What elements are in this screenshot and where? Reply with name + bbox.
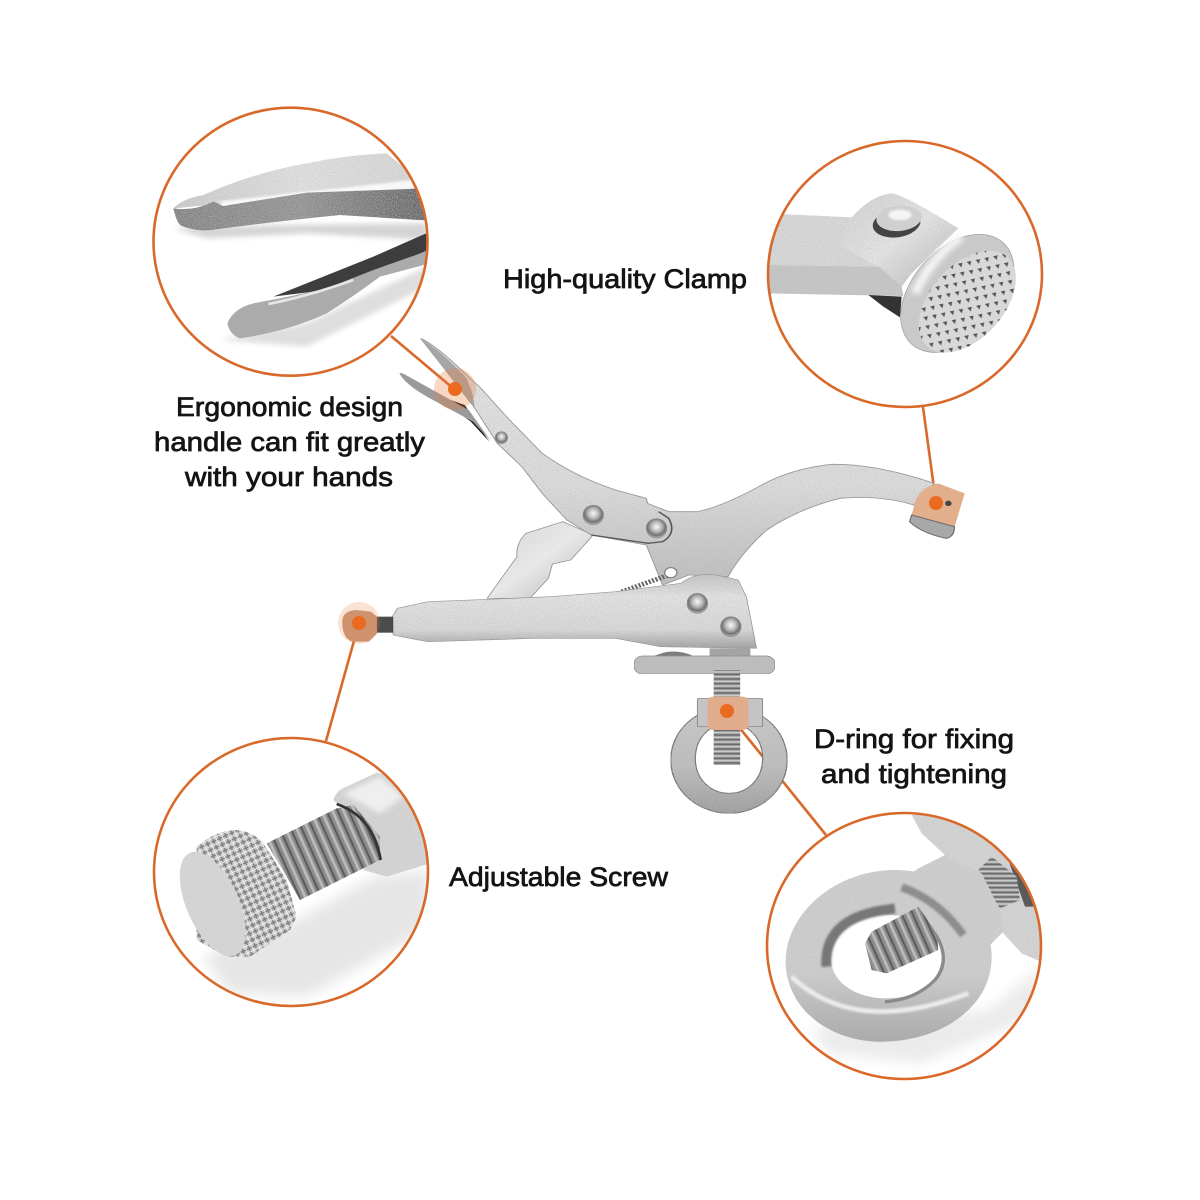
neck underside (902, 887, 963, 935)
upper jaw dark face (173, 188, 430, 230)
ring (786, 870, 992, 1042)
upper thread (977, 857, 1020, 908)
base plate (912, 813, 1048, 963)
screw head (342, 610, 377, 642)
plate dark edge (1009, 862, 1034, 907)
base plate (634, 656, 775, 674)
head cylinder (840, 193, 958, 287)
infographic (152, 106, 1044, 1080)
arm front face (765, 265, 903, 296)
spring (622, 575, 669, 592)
panel: D-ring closeup (767, 813, 1048, 1079)
panel: clamp head closeup (765, 141, 1042, 407)
shadow under arm (868, 295, 902, 317)
soft shadow (203, 870, 430, 997)
label: ergonomic design: handle can fit greatly (154, 427, 426, 457)
label: D-ring: D-ring for fixing (814, 724, 1014, 754)
upper handle and clamp arm (421, 338, 934, 585)
jaw shadow (173, 223, 427, 240)
label: ergonomic design (154, 392, 426, 492)
rivets (495, 432, 741, 637)
label: ergonomic design: with your hands (184, 462, 393, 492)
spring hole (665, 568, 677, 578)
soft shadow (816, 974, 1036, 1064)
lower tip of the handle (399, 373, 491, 442)
lower jaw dark inner (273, 232, 430, 297)
handle tip shading (421, 338, 475, 408)
clamp head cylinder (910, 483, 965, 538)
lower handle (391, 574, 757, 648)
spacer block (710, 648, 750, 660)
arm top face (765, 213, 879, 267)
panel: handle tips closeup (154, 108, 430, 376)
label: ergonomic design: Ergonomic design (176, 392, 403, 422)
screw thread (375, 617, 393, 633)
pivot link edge (591, 512, 672, 543)
hotspot: clamp head (929, 496, 943, 510)
leader lines (326, 336, 936, 835)
knurled head (197, 830, 297, 957)
bolt neck (714, 670, 740, 698)
thread (267, 805, 380, 900)
ring inner shade (826, 909, 895, 967)
rivet (876, 206, 922, 232)
label: D-ring (814, 724, 1014, 789)
handle barrel (333, 773, 433, 877)
upper jaw light face (173, 153, 430, 208)
hotspot: handle tips (434, 368, 476, 410)
neck block (914, 855, 1004, 944)
D-ring (671, 707, 787, 813)
label: D-ring: and tightening (821, 759, 1007, 789)
eye block (697, 698, 763, 727)
black gap between handle tips (432, 393, 489, 442)
lower thread (865, 907, 938, 973)
lower bolt (714, 727, 740, 765)
dome under jaw (650, 652, 693, 660)
lower jaw light face (227, 250, 430, 338)
label: adjustable screw: Adjustable Screw (449, 862, 669, 892)
cap dome (900, 234, 1014, 353)
clamp tool (342, 338, 965, 813)
panel: adjustable screw closeup (154, 738, 433, 1006)
gripping mesh (919, 250, 1016, 352)
hotspot: D-ring (720, 704, 734, 718)
rivet socket (872, 217, 920, 238)
hotspot: screw (338, 602, 380, 644)
flat face (180, 852, 246, 956)
small release lever (487, 522, 593, 598)
label: high-quality clamp: High-quality Clamp (503, 264, 747, 294)
